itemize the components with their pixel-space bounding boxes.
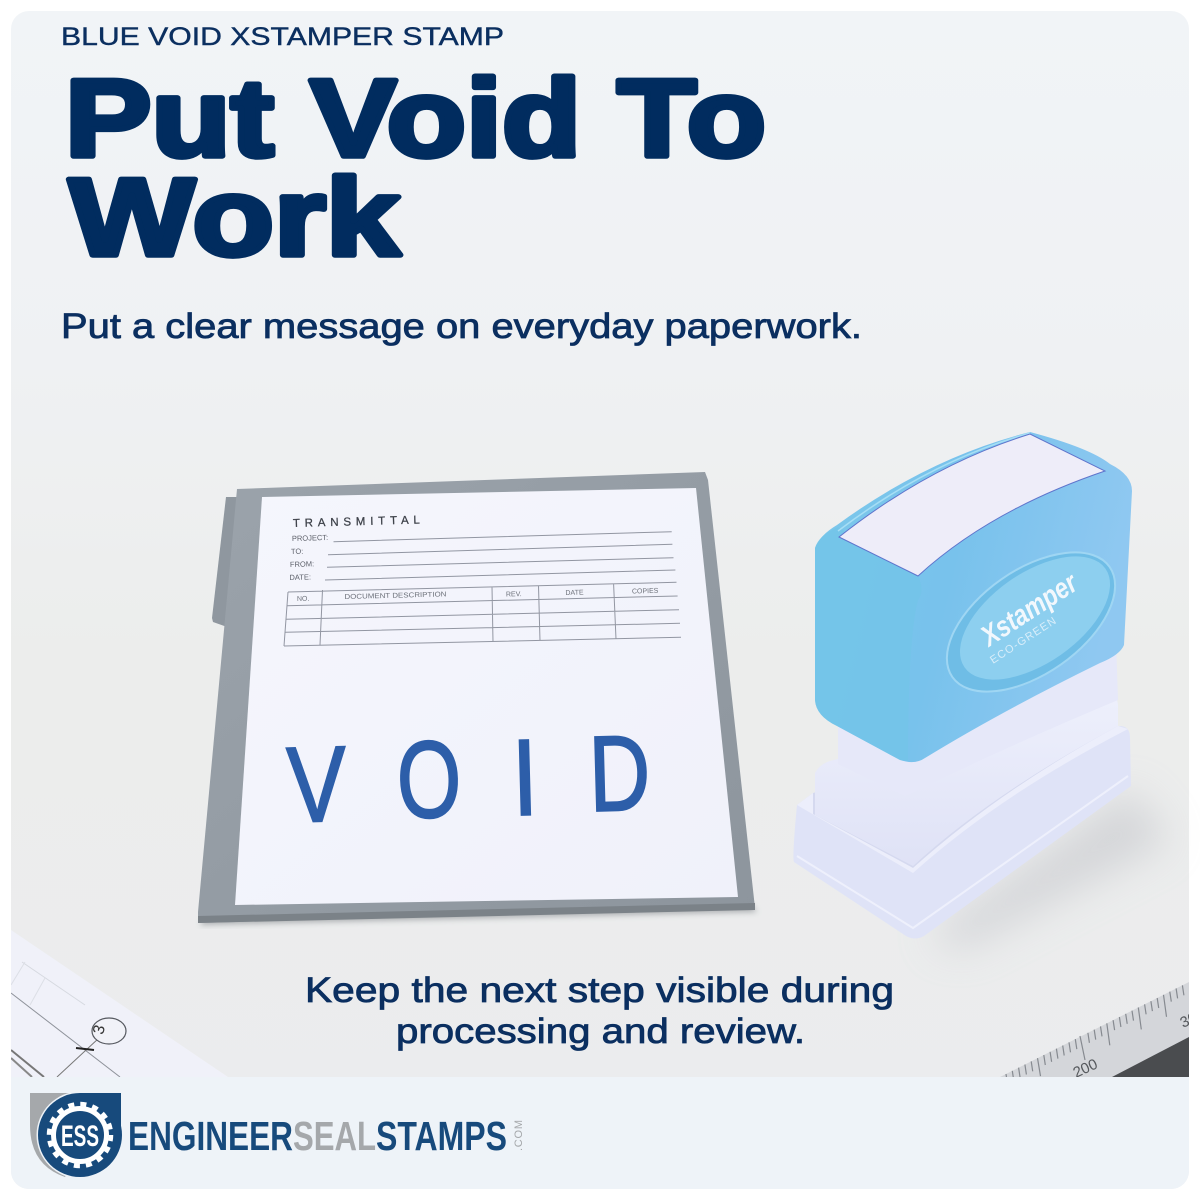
caption: Keep the next step visible during [305,971,894,1010]
eyebrow label: BLUE VOID XSTAMPER STAMP [61,23,504,51]
logo wordmark: ENGINEER [128,1113,293,1159]
form field labels: PROJECT: [292,533,328,543]
stamp shadow [930,790,1170,950]
form table: NO. [297,596,310,603]
caption [305,971,894,1051]
VOID stamp impression: D [587,714,652,834]
form field labels: FROM: [290,559,314,569]
stamp body upper [838,640,1118,796]
logo wordmark: STAMPS [376,1113,507,1159]
ruler numerals: 30 [1178,1009,1200,1032]
ruler numerals: 200 [1071,1056,1100,1082]
main headline: Work [69,156,401,279]
logo wordmark: SEAL [293,1113,376,1159]
footer band [11,1077,1189,1189]
main headline: Put Void To [65,57,766,180]
caption: processing and review. [396,1012,805,1051]
stamp base tray [793,726,1131,938]
form field labels: DATE: [289,572,311,582]
form table: COPIES [632,588,659,595]
stamp blue cap [815,432,1132,762]
form table: DATE [565,590,584,597]
logo emblem [30,1092,124,1178]
stamp top label [839,434,1105,576]
paper sheet [235,488,738,905]
Xstamper logo oval: Xstamper [974,566,1085,654]
form table: DOCUMENT DESCRIPTION [344,591,447,601]
Xstamper stamp [793,432,1139,938]
ruler [1000,982,1189,1077]
ruler numerals [1073,1014,1189,1077]
form table [284,532,681,646]
callout circle 3: 3 [90,1023,109,1036]
form title: TRANSMITTAL [293,514,421,530]
Xstamper logo oval [923,524,1139,720]
form field labels: TO: [291,547,303,556]
main headline [65,57,766,279]
form table: REV. [506,591,522,598]
VOID stamp impression: O [395,718,463,842]
subheading: Put a clear message on everyday paperwork. [61,307,862,346]
VOID stamp impression: V [285,723,348,845]
VOID stamp impression: I [510,718,539,839]
stamp body lower [815,690,1118,866]
Xstamper logo oval: ECO-GREEN [988,615,1058,667]
logo wordmark: .COM [513,1120,525,1151]
logo wordmark [128,1113,525,1159]
callout circle 3 [90,1018,126,1044]
folder shadow [200,905,757,925]
VOID stamp impression [285,714,652,845]
logo emblem: ESS [61,1120,99,1153]
blueprint corner [11,930,228,1077]
file folder [198,472,755,923]
form field labels [289,533,328,582]
